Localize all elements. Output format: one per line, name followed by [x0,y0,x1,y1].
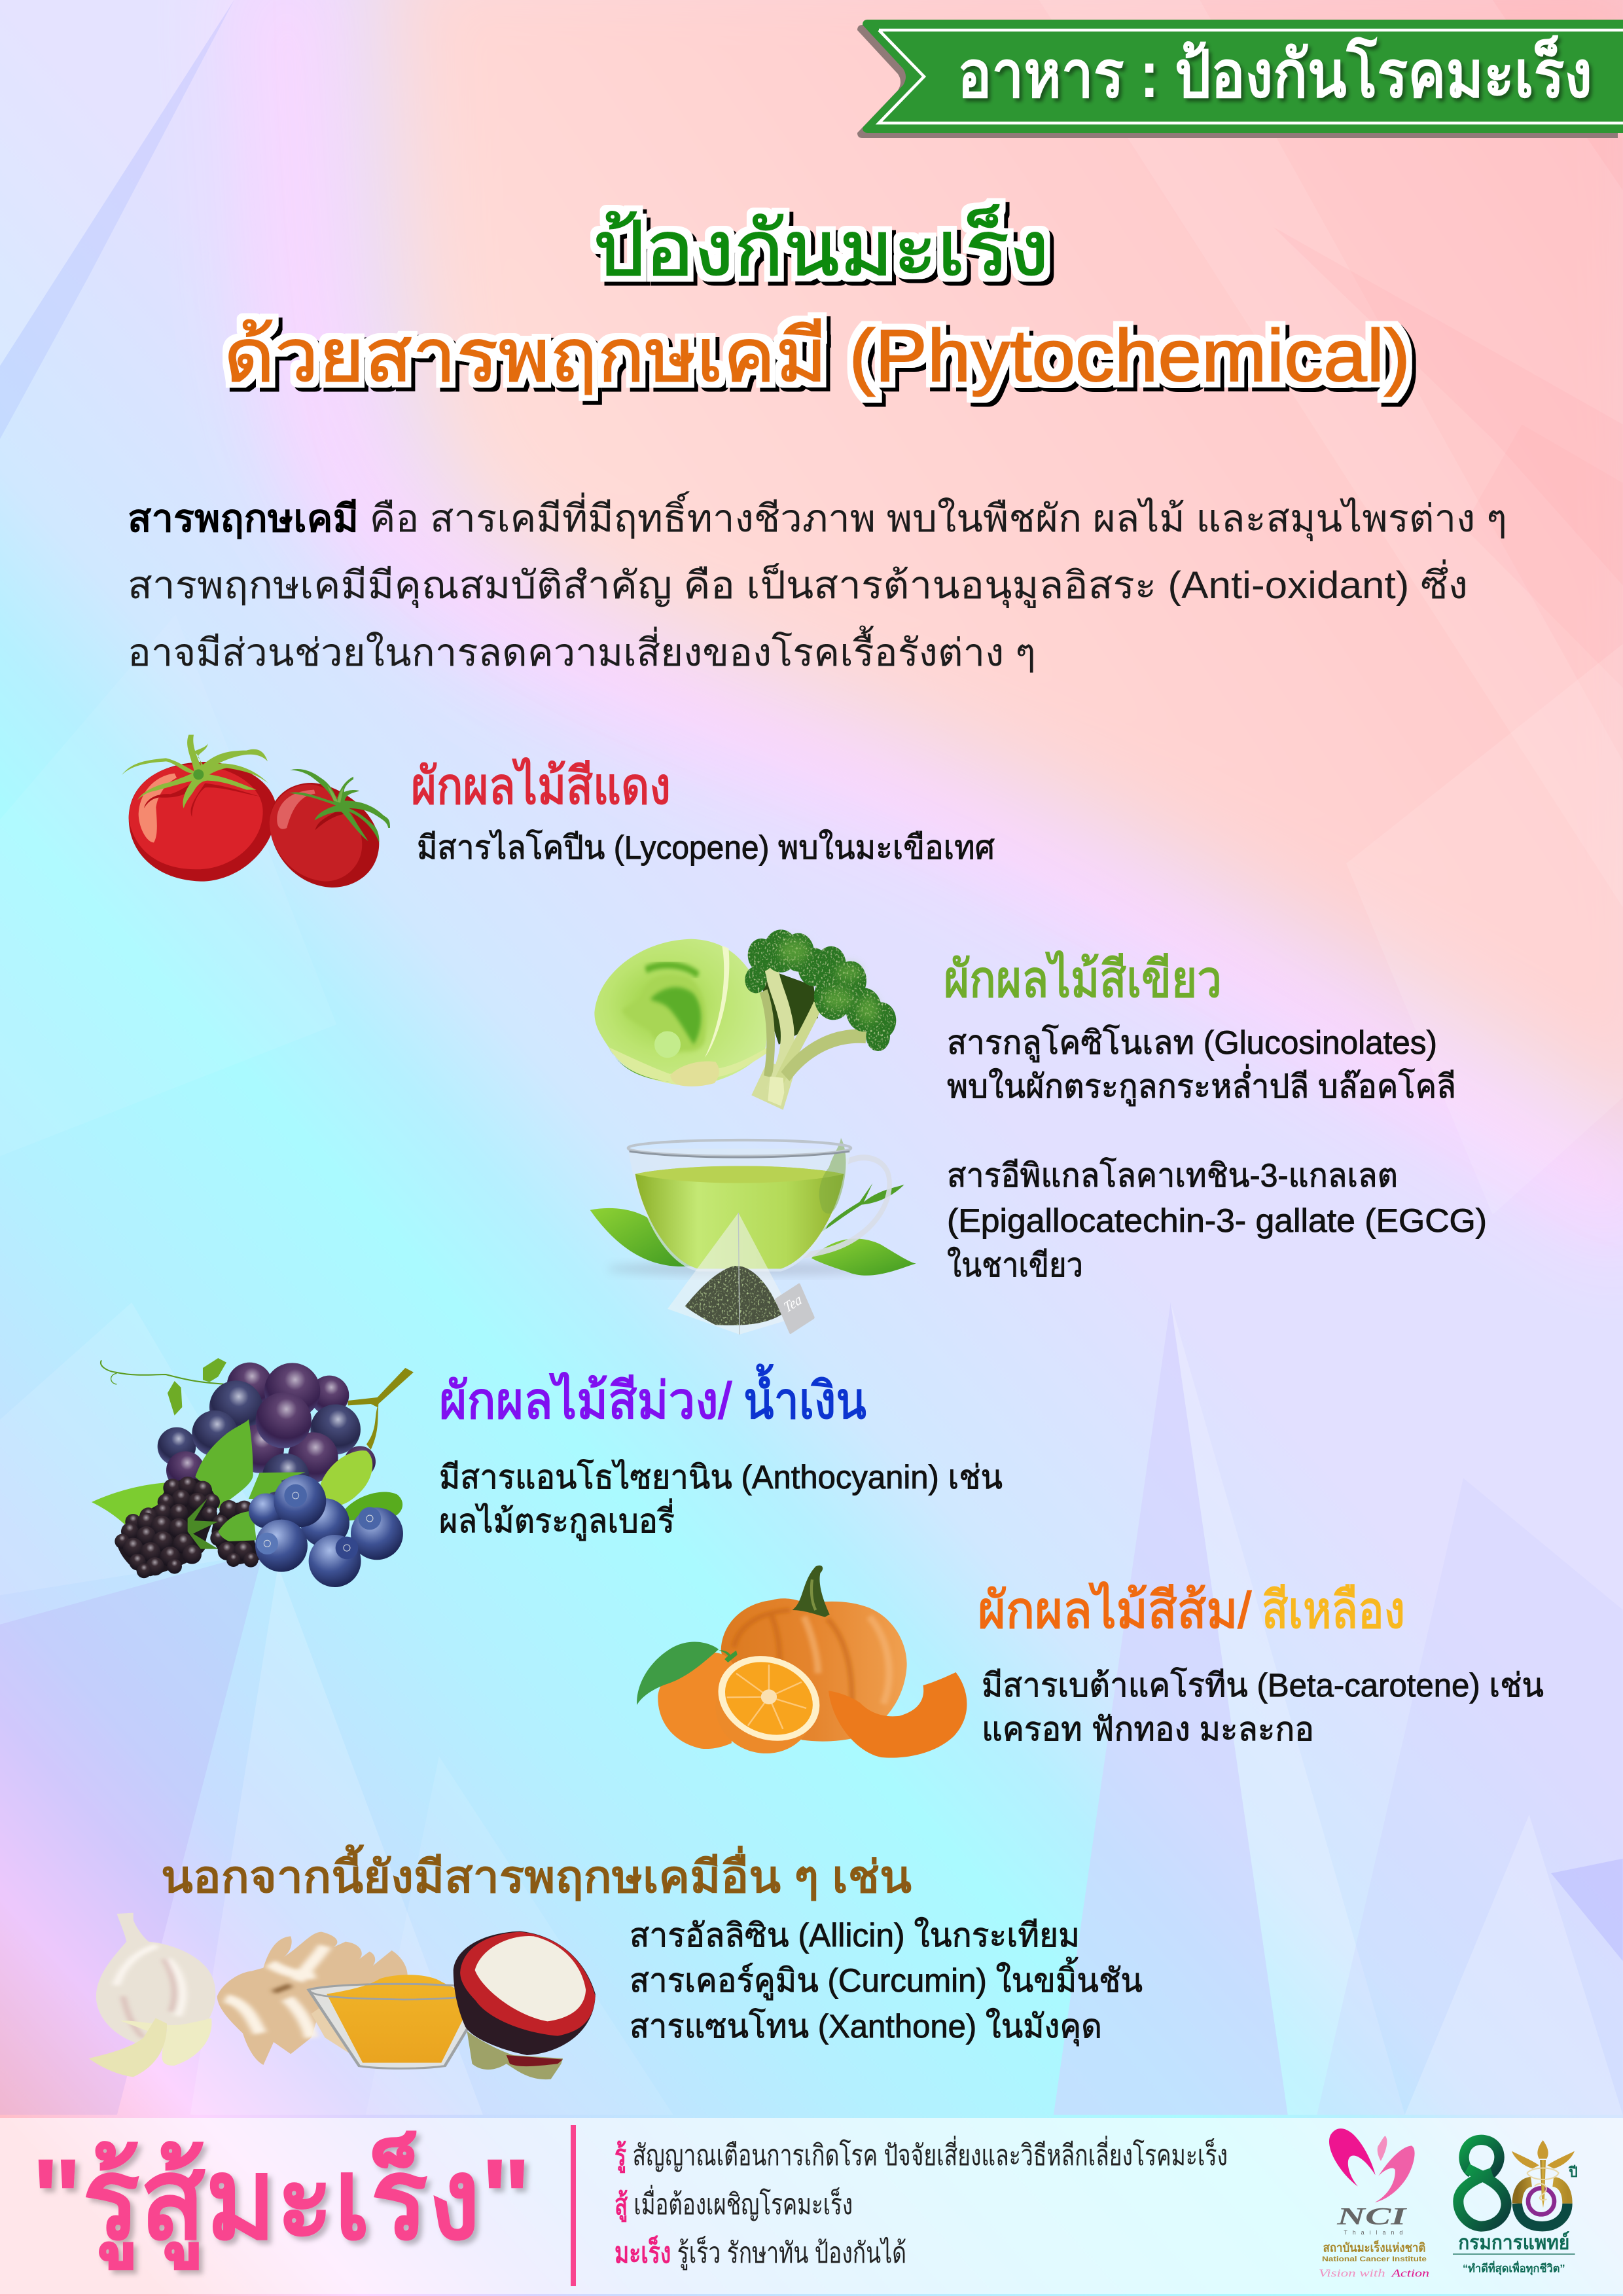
purple and blue section text: ผลไม้ตระกูลเบอรี่ [439,1499,675,1541]
red section text [411,757,995,866]
icon: green tea cup [590,1138,916,1335]
logo: Department of Medical Services 80 years [1453,2140,1578,2276]
icon: garlic, ginger, turmeric, mangosteen [89,1913,596,2079]
icon: pumpkin and orange [637,1566,967,1769]
other phytochemicals text: สารเคอร์คูมิน (Curcumin) ในขมิ้นชัน [630,1957,1143,2000]
purple and blue section text: มีสารแอนโธไซยานิน (Anthocyanin) เช่น [439,1459,1003,1496]
purple and blue section text [439,1364,1003,1541]
other phytochemicals text: สารอัลลิซิน (Allicin) ในกระเทียม [630,1917,1080,1954]
green section text: (Epigallocatechin-3- gallate (EGCG) [947,1202,1487,1239]
main title [224,204,1410,397]
orange and yellow section text: มีสารเบต้าแคโรทีน (Beta-carotene) เช่น [982,1667,1544,1704]
intro paragraph: อาจมีส่วนช่วยในการลดความเสี่ยงของโรคเรื้อรังต่าง ๆ [128,626,1036,674]
purple and blue section text: น้ำเงิน [743,1364,866,1429]
green section text: พบในผักตระกูลกระหล่ำปลี บล๊อคโคลี [947,1064,1456,1106]
other phytochemicals text [630,1917,1143,2046]
logo: National Cancer Institute: Action [1391,2267,1429,2279]
orange and yellow section text: แครอท ฟักทอง มะละกอ [982,1711,1314,1748]
tea tag label: Tea [781,1291,804,1316]
footer lines: สู้ เมื่อต้องเผชิญโรคมะเร็ง [615,2184,853,2222]
green section text: ในชาเขียว [947,1247,1083,1283]
red section text: มีสารไลโคปีน (Lycopene) พบในมะเขือเทศ [417,829,995,866]
green section text: สารอีพิแกลโลคาเทชิน-3-แกลเลต [947,1157,1398,1194]
logo: National Cancer Institute: Vision with [1319,2267,1385,2279]
green section text [944,950,1487,1283]
logo: National Cancer Institute: Thailand [1344,2229,1402,2236]
footer lines [615,2135,1228,2270]
logo: Department of Medical Services 80 years: “ทำดีที่สุดเพื่อทุกชีวิต” [1463,2261,1565,2276]
green section text: สารกลูโคซิโนเลท (Glucosinolates) [947,1024,1437,1062]
red section text: ผักผลไม้สีแดง [411,757,671,815]
green section text: ผักผลไม้สีเขียว [944,950,1222,1008]
purple and blue section text: ผักผลไม้สีม่วง/ [439,1372,732,1429]
orange and yellow section text: ผักผลไม้สีส้ม/ [978,1581,1251,1639]
footer lines: รู้ สัญญาณเตือนการเกิดโรค ปัจจัยเสี่ยงและวิธีหลีกเลี่ยงโรคมะเร็ง [615,2135,1228,2173]
footer band [0,2118,1623,2294]
intro paragraph: สารพฤกษเคมี คือ สารเคมีที่มีฤทธิ์ทางชีวภาพ พบในพืชผัก ผลไม้ และสมุนไพรต่าง ๆ [128,491,1507,542]
logo: National Cancer Institute [1319,2128,1429,2279]
logo: Department of Medical Services 80 years: ปี [1568,2164,1578,2180]
other phytochemicals heading: นอกจากนี้ยังมีสารพฤกษเคมีอื่น ๆ เช่น [161,1844,912,1902]
logo: National Cancer Institute: NCI [1336,2202,1408,2229]
footer lines: มะเร็ง รู้เร็ว รักษาทัน ป้องกันได้ [615,2235,906,2270]
logo: National Cancer Institute: สถาบันมะเร็งแห่งชาติ [1323,2240,1425,2255]
orange and yellow section text: สีเหลือง [1262,1581,1405,1639]
icon: cabbage and broccoli [594,929,896,1110]
intro paragraph: สารพฤกษเคมีมีคุณสมบัติสำคัญ คือ เป็นสารต้านอนุมูลอิสระ (Anti-oxidant) ซึ่ง [128,559,1468,609]
intro paragraph [128,491,1507,674]
header ribbon [857,20,1623,138]
icon: grapes and berries [92,1358,414,1587]
other phytochemicals text: สารแซนโทน (Xanthone) ในมังคุด [630,2008,1102,2046]
logo: National Cancer Institute: National Cancer Institute [1322,2255,1427,2263]
main title: ด้วยสารพฤกษเคมี (Phytochemical) [224,315,1410,397]
footer slogan: "รู้สู้มะเร็ง" [31,2130,531,2270]
main title: ป้องกันมะเร็ง [593,204,1049,291]
logo: Department of Medical Services 80 years: กรมการแพทย์ [1458,2231,1569,2254]
icon: tomatoes [122,735,390,888]
orange and yellow section text [978,1581,1544,1748]
